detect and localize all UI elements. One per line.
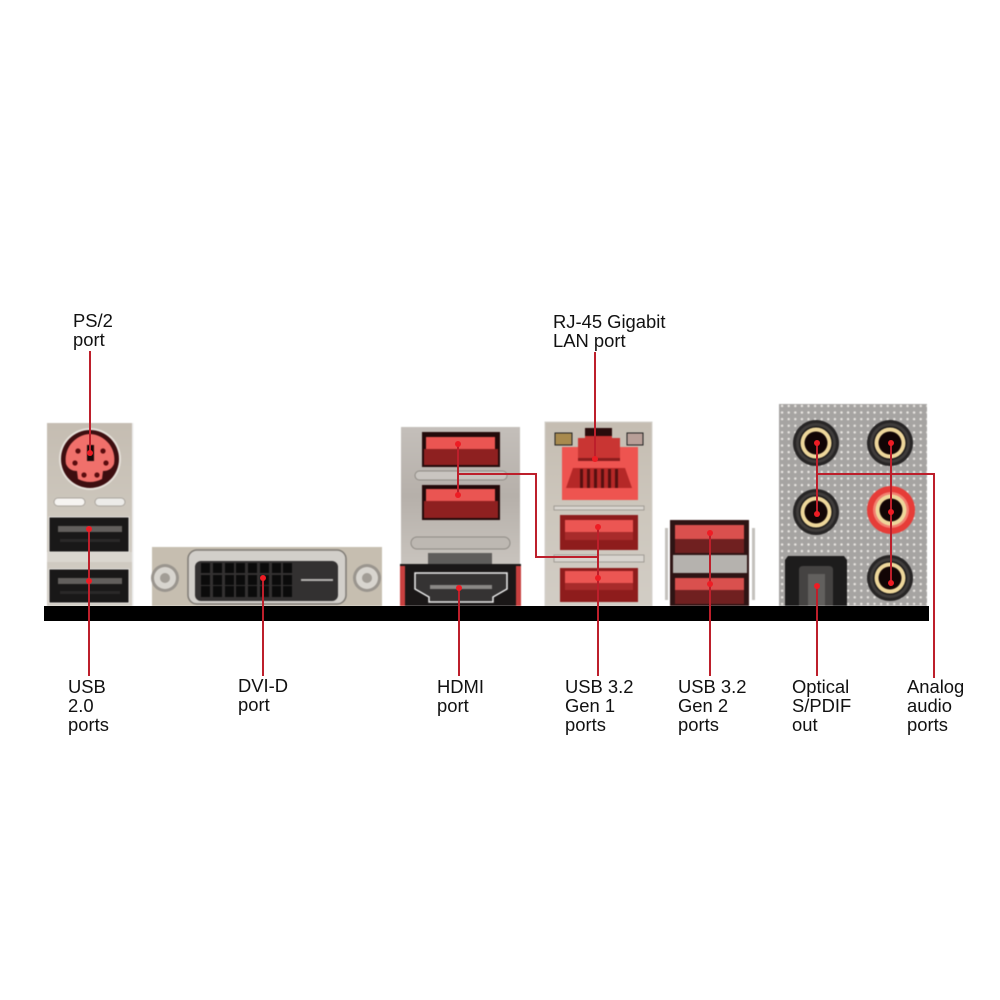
label: DVI-D port: DVI-D <box>238 675 288 696</box>
label: PS/2 port: port <box>73 329 105 350</box>
label: Analog audio ports: Analog <box>907 676 964 697</box>
icon: HDMI port <box>400 564 521 606</box>
icon: USB 2.0 port lower <box>49 569 129 603</box>
label: Analog audio ports: ports <box>907 714 948 735</box>
icon: PS/2 connector <box>59 428 121 490</box>
icon: USB port red 1 <box>422 432 500 467</box>
icon: USB Gen 1 port upper <box>560 515 638 550</box>
panel: RJ-45 and USB 3.2 Gen 1 shell <box>545 422 652 606</box>
label: USB 2.0 ports: 2.0 <box>68 695 94 716</box>
label: PS/2 port: PS/2 <box>73 310 113 331</box>
icon: DVI socket <box>195 561 338 601</box>
icon: audio jack top right <box>867 420 913 466</box>
panel: DVI-D connector <box>151 547 382 606</box>
label: RJ-45 Gigabit LAN port: LAN port <box>553 330 626 351</box>
label: USB 3.2 Gen 2 ports: Gen 2 <box>678 695 728 716</box>
label: DVI-D port: port <box>238 694 270 715</box>
label: USB 3.2 Gen 2 ports: ports <box>678 714 719 735</box>
label: USB 2.0 ports: ports <box>68 714 109 735</box>
icon: divider upper <box>554 506 644 510</box>
shell slot upper <box>415 471 507 480</box>
callout dots <box>86 440 894 591</box>
icon: RJ-45 LAN port <box>555 428 643 500</box>
label: Analog audio ports: audio <box>907 695 952 716</box>
label: Optical S/PDIF out: out <box>792 714 818 735</box>
label: Optical S/PDIF out: Optical <box>792 676 849 697</box>
label: USB 2.0 ports: USB <box>68 676 106 697</box>
panel: stacked USB and HDMI shell <box>400 427 521 606</box>
icon: thumb screw left <box>151 564 179 592</box>
icon: USB port red 2 <box>422 485 500 520</box>
icon: audio jack middle left <box>793 489 839 535</box>
label: HDMI port: port <box>437 695 469 716</box>
label: RJ-45 Gigabit LAN port: RJ-45 Gigabit <box>553 311 665 332</box>
label: USB 3.2 Gen 2 ports: USB 3.2 <box>678 676 746 697</box>
shell slot lower <box>411 537 510 549</box>
label: USB 3.2 Gen 1 ports: ports <box>565 714 606 735</box>
icon: USB Gen 1 port lower <box>560 568 638 602</box>
icon: USB 2.0 port upper <box>49 517 129 552</box>
icon: audio jack middle right red <box>867 486 915 534</box>
label: Optical S/PDIF out: S/PDIF <box>792 695 851 716</box>
base bar <box>44 606 929 621</box>
label: HDMI port: HDMI <box>437 676 484 697</box>
panel: PS/2 and USB 2.0 shell <box>47 423 134 606</box>
icon: optical S/PDIF port <box>785 556 847 606</box>
callout lines <box>89 351 934 678</box>
icon: audio jack top left <box>793 420 839 466</box>
icon: PS/2 shell slots <box>54 498 125 506</box>
icon: thumb screw right <box>353 564 381 592</box>
icon: divider lower <box>554 555 644 562</box>
label: USB 3.2 Gen 1 ports: USB 3.2 <box>565 676 634 697</box>
label: USB 3.2 Gen 1 ports: Gen 1 <box>565 695 615 716</box>
panel: audio plate <box>779 404 927 606</box>
icon: audio jack bottom right <box>867 555 913 601</box>
panel: USB 3.2 Gen 2 stacked port <box>665 520 755 606</box>
